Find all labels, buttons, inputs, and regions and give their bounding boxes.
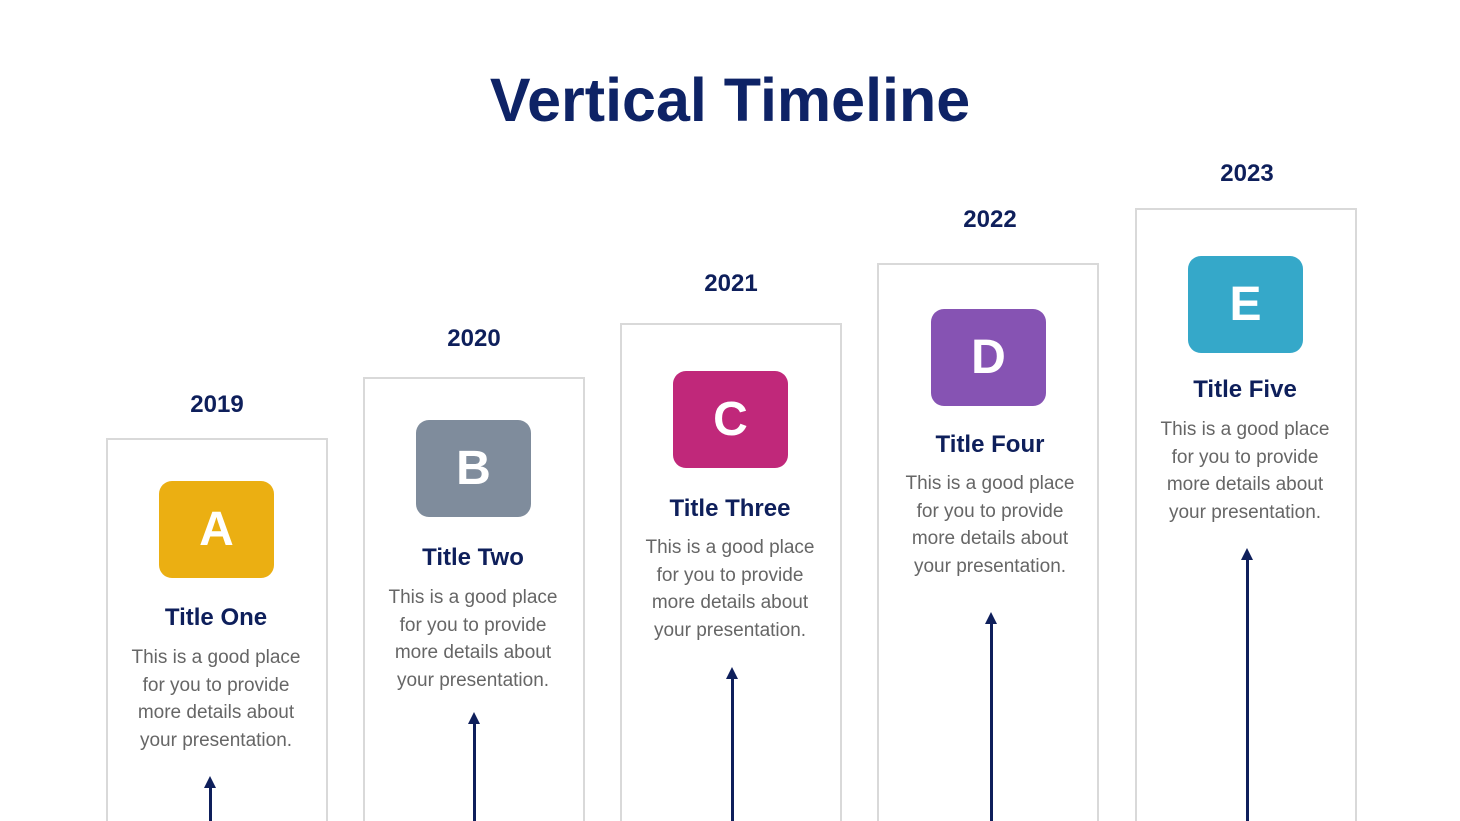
arrow [990, 620, 993, 821]
box [106, 438, 328, 821]
icon B [416, 420, 531, 517]
text: more details about [138, 702, 294, 723]
icon D: D [971, 331, 1006, 384]
icon C: C [713, 393, 748, 446]
year: 2019 [190, 391, 244, 418]
text: for you to provide [1172, 446, 1318, 468]
icon E: E [1229, 278, 1262, 331]
heading: Title Five [1193, 376, 1297, 403]
panel: 2022 [877, 206, 1099, 821]
text: This is a good place [906, 473, 1074, 494]
year: 2020 [447, 325, 501, 352]
heading: Title Four [936, 431, 1044, 458]
heading: Title Two [422, 544, 524, 571]
arrow [209, 784, 212, 821]
box [1135, 208, 1357, 821]
heading: Title One [165, 604, 267, 631]
text: for you to provide [657, 564, 803, 586]
text: your presentation. [914, 556, 1066, 576]
year: 2021 [704, 270, 758, 297]
icon E [1188, 256, 1303, 353]
year: 2023 [1220, 160, 1274, 187]
title: Vertical Timeline [490, 66, 970, 134]
text [388, 587, 558, 690]
arrow [473, 720, 476, 821]
box [877, 263, 1099, 821]
text: more details about [1167, 474, 1323, 495]
text [1160, 419, 1330, 522]
panel: 2021 [620, 270, 842, 821]
box [363, 377, 585, 821]
box [620, 323, 842, 821]
text: your presentation. [140, 730, 292, 750]
text: This is a good place [388, 587, 558, 608]
panel: 2020 [363, 325, 585, 821]
icon D [931, 309, 1046, 406]
text: for you to provide [917, 500, 1063, 522]
text: your presentation. [654, 620, 806, 640]
text [906, 473, 1074, 576]
text: more details about [652, 592, 808, 613]
text [646, 537, 814, 640]
heading: Title Three [670, 495, 790, 522]
text: more details about [912, 528, 1068, 549]
arrow [731, 675, 734, 821]
icon B: B [456, 442, 491, 495]
text: your presentation. [397, 670, 549, 690]
panel: 2019 [106, 391, 328, 821]
text: for you to provide [400, 614, 546, 636]
text: This is a good place [132, 647, 300, 668]
year: 2022 [963, 206, 1017, 233]
text: more details about [395, 642, 551, 663]
icon C [673, 371, 788, 468]
arrow [1246, 556, 1249, 821]
text: for you to provide [143, 674, 289, 696]
text: your presentation. [1169, 502, 1321, 522]
text: This is a good place [646, 537, 814, 558]
icon A [159, 481, 274, 578]
text: This is a good place [1160, 419, 1330, 440]
text [132, 647, 300, 750]
icon A: A [199, 503, 234, 556]
panel: 2023 [1135, 160, 1357, 821]
